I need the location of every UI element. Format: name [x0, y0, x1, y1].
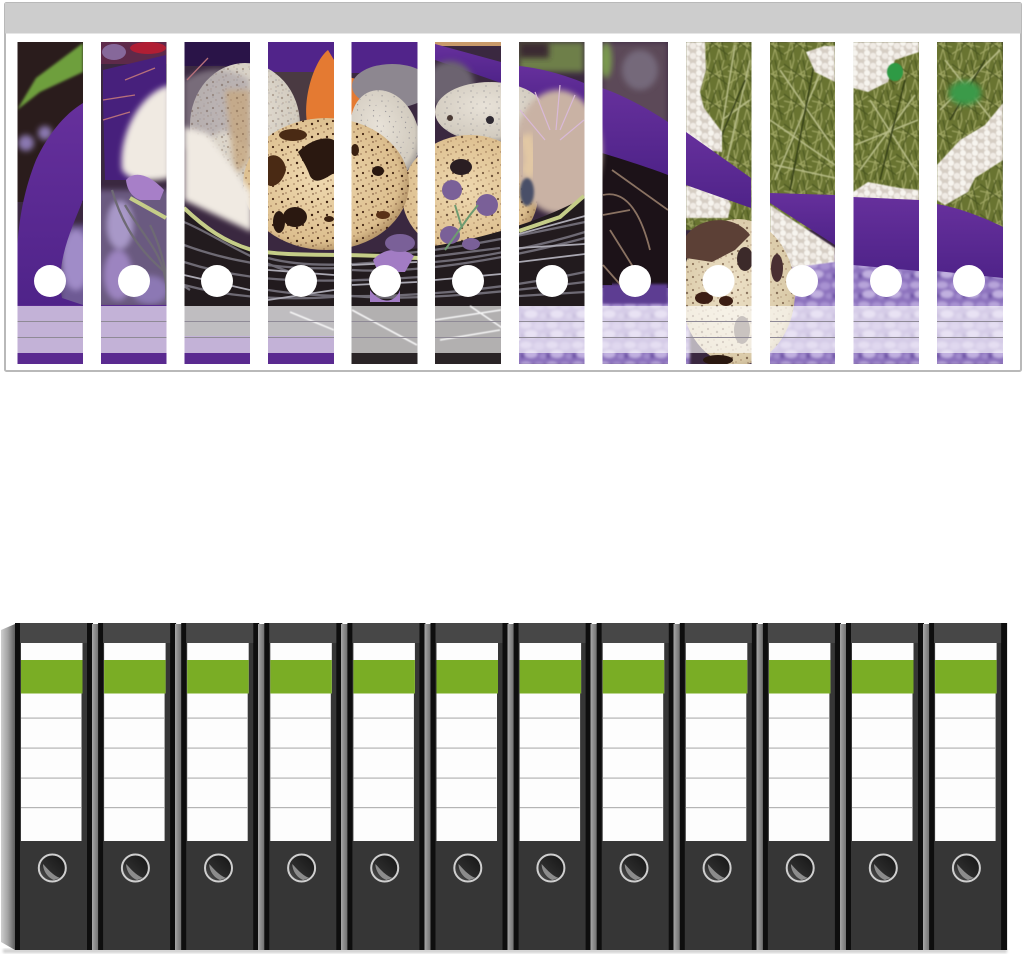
binder 1 [15, 623, 93, 950]
large speckled central egg [243, 118, 409, 250]
photo background [0, 42, 1024, 364]
band rule lines [0, 321, 1024, 338]
lavender bush [602, 42, 668, 122]
lilac petal [126, 175, 164, 200]
purple band behind eggs [103, 55, 166, 180]
binder shadow [3, 949, 1007, 953]
binder 12 [923, 623, 1007, 950]
twig nest [112, 170, 668, 306]
photo cut into twelve spine strips [0, 42, 1024, 365]
translucent writing band [0, 306, 1024, 353]
sheet background [5, 3, 1021, 371]
row of twelve black binders [1, 623, 1007, 953]
back speckled egg [184, 63, 300, 187]
binder 8 [590, 623, 675, 950]
binder 11 [840, 623, 924, 950]
label sheet panel [0, 3, 1024, 371]
plastic sheen streaks under nest [290, 306, 520, 345]
binder 3 [175, 623, 259, 950]
dark top left background [18, 42, 83, 202]
first binder side spine [1, 624, 15, 950]
lilac pebble ground [0, 165, 1024, 365]
grey tab band [5, 3, 1021, 34]
red flowers [101, 42, 167, 64]
tan feather right [514, 85, 602, 214]
binder 5 [341, 623, 425, 950]
grey back eggs [352, 58, 540, 170]
lavender sprigs [385, 180, 498, 252]
beige egg right of centre [402, 135, 538, 255]
binder 7 [508, 623, 592, 950]
grass and white pearl wreath [686, 42, 1003, 268]
pink feather wisps [103, 58, 208, 120]
twigs on dark thicket [603, 170, 668, 290]
punch holes [34, 265, 985, 297]
blurred lilac beads [18, 126, 171, 310]
binder 2 [92, 623, 176, 950]
bottom front egg [681, 219, 795, 365]
white feather left [122, 85, 252, 232]
binder 10 [756, 623, 841, 950]
lilac petal on nest [373, 250, 414, 272]
binder 4 [258, 623, 342, 950]
binder 9 [674, 623, 758, 950]
green leaf [17, 43, 83, 110]
orange feather [306, 50, 360, 120]
binder 6 [424, 623, 508, 950]
purple ribbon [16, 44, 1003, 305]
dark twig thicket [602, 153, 668, 288]
